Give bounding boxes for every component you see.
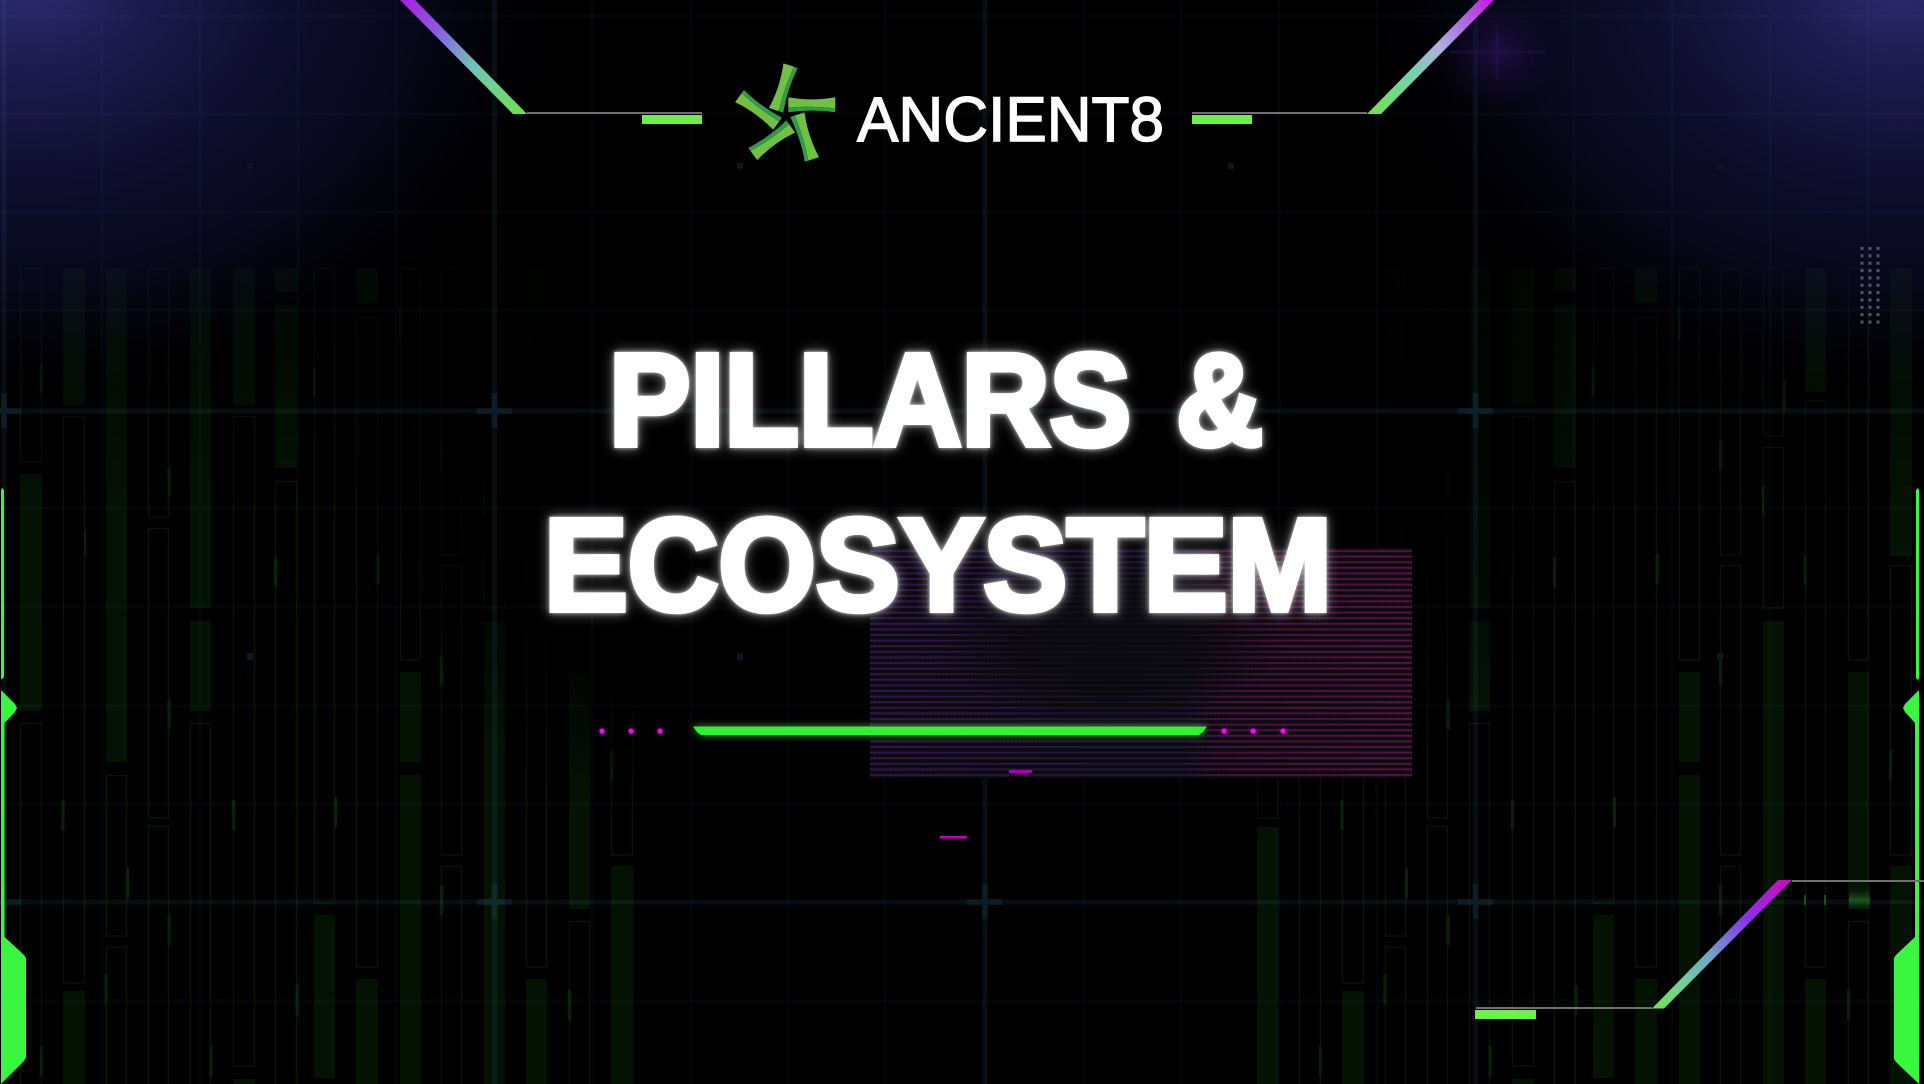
icon: pinwheel star (735, 63, 835, 162)
dot matrix (1860, 247, 1880, 328)
background: small grid dots (247, 163, 1723, 660)
title (544, 326, 1332, 638)
right edge frame (1894, 488, 1919, 1084)
magenta dots right (1221, 728, 1286, 734)
title line 2: ECOSYSTEM (544, 491, 1332, 638)
green bar (693, 726, 1207, 735)
purple flare (1437, 0, 1557, 112)
logo (735, 63, 1164, 162)
background: central vignette (320, 10, 1604, 890)
header decoration: top right (1192, 0, 1494, 124)
glitch panel (870, 548, 1412, 778)
background: top corner glow (0, 0, 1924, 430)
background: pillar columns (0, 260, 1924, 1084)
magenta dots left (599, 728, 663, 734)
divider: green bar with magenta dots (599, 726, 1286, 735)
left edge frame (1, 488, 26, 1084)
title line 1: & (1176, 326, 1263, 473)
title line 1: PILLARS (609, 326, 1131, 473)
small magenta dash (940, 836, 967, 838)
footer decoration: bottom right (1475, 880, 1924, 1019)
header decoration: top left (400, 0, 702, 124)
green flare (1805, 888, 1870, 910)
wordmark: ANCIENT8 (857, 85, 1164, 155)
